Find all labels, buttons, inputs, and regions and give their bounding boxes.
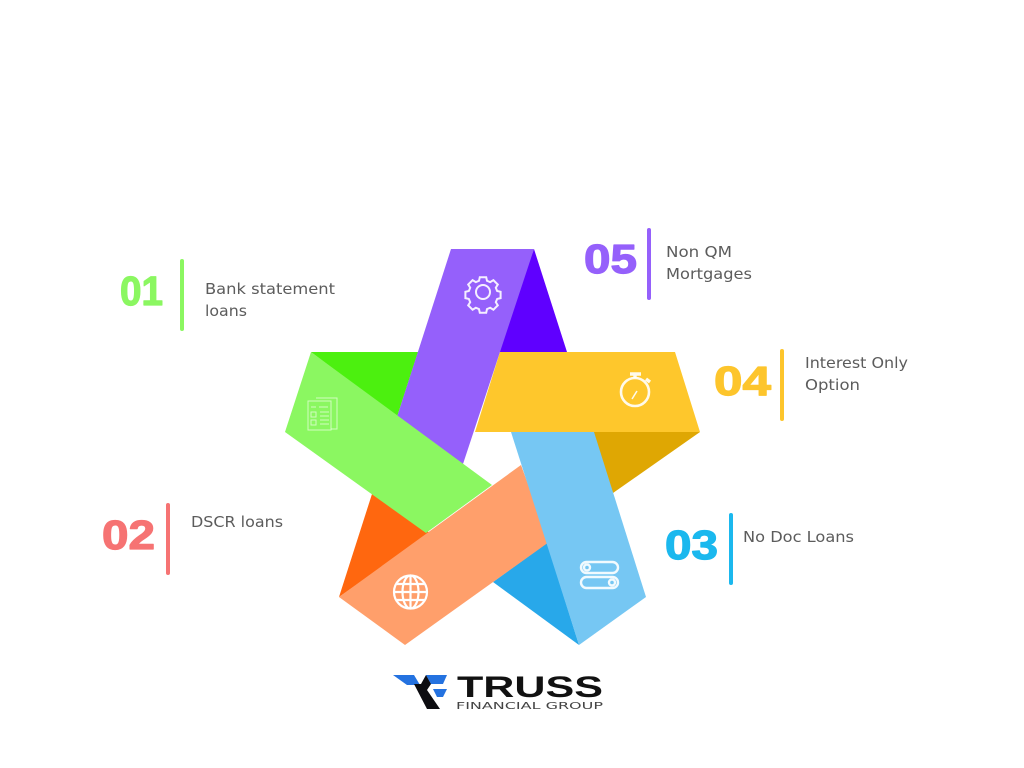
divider 05 [647, 228, 651, 300]
band: orange [339, 465, 549, 645]
item 02 [102, 503, 283, 575]
item 01 [120, 259, 335, 331]
icon: gear [465, 277, 501, 313]
icon: stopwatch [621, 374, 650, 406]
number 05: 05 [584, 236, 637, 282]
logo wordmark: TRUSS [457, 671, 603, 704]
divider 03 [729, 513, 733, 585]
logo mark [393, 675, 447, 709]
item 05 [584, 228, 752, 300]
band: yellow [475, 352, 700, 432]
logo: Truss Financial Group [393, 671, 603, 712]
item 04 [714, 349, 908, 421]
star diagram [285, 249, 700, 645]
fold: dark purple [495, 249, 567, 352]
divider 04 [780, 349, 784, 421]
label 04: Option [805, 376, 860, 394]
icon: globe [394, 576, 427, 608]
number 04: 04 [714, 358, 771, 404]
label 02: DSCR loans [191, 513, 283, 531]
band: purple [397, 249, 534, 464]
icon: toggle switches [581, 562, 618, 588]
label 01 [205, 280, 335, 320]
label 04: Interest Only [805, 354, 908, 372]
fold: dark green [311, 352, 418, 417]
icon: documents [308, 398, 337, 430]
number 02: 02 [102, 512, 155, 558]
divider 01 [180, 259, 184, 331]
label 05: Mortgages [666, 265, 752, 283]
number 03: 03 [665, 522, 718, 568]
divider 02 [166, 503, 170, 575]
label 05: Non QM [666, 243, 732, 261]
item 03 [665, 513, 854, 585]
fold: dark orange [339, 494, 430, 597]
label 03: No Doc Loans [743, 528, 854, 546]
fold: dark yellow [590, 430, 700, 493]
logo tagline: FINANCIAL GROUP [456, 701, 603, 712]
label 01: loans [205, 302, 247, 320]
label 04 [805, 354, 908, 394]
band: green [285, 352, 492, 533]
label 01: Bank statement [205, 280, 335, 298]
number 01: 01 [120, 268, 163, 314]
band: light blue [511, 432, 646, 645]
fold: dark blue [493, 543, 579, 645]
label 05 [666, 243, 752, 283]
